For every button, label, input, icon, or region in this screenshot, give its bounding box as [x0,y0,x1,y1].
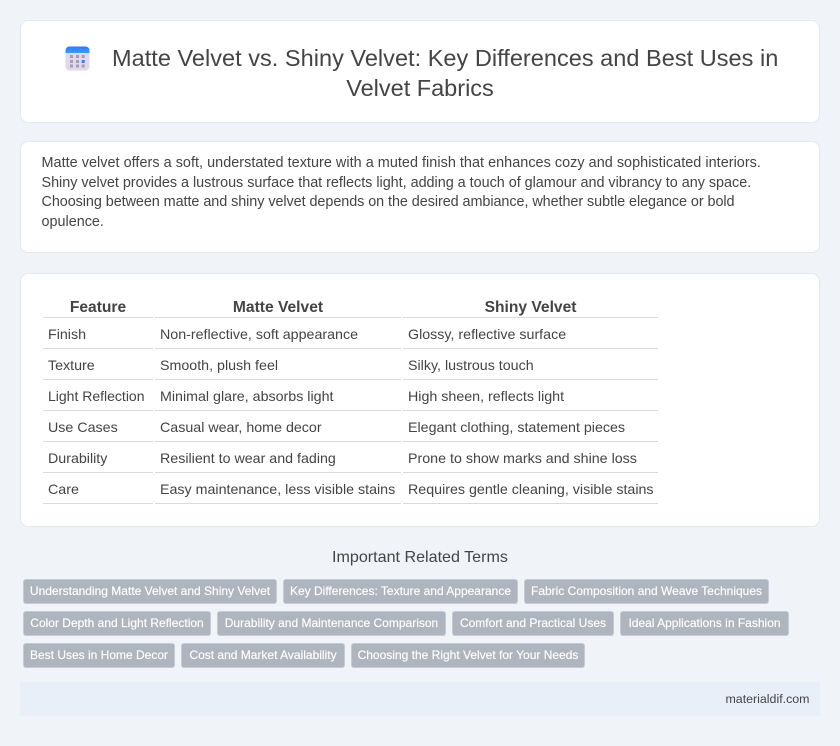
row: Finish: Finish [48,327,86,343]
tag [181,643,345,668]
tag [23,643,175,668]
row: Durability [48,451,637,467]
tag [452,611,614,636]
tag: Understanding Matte Velvet and Shiny Velvet [30,584,270,598]
row: Care [48,482,654,498]
footer source: materialdif.com [725,692,810,706]
row: Finish: Non-reflective, soft appearance [160,327,358,343]
tag: Fabric Composition and Weave Techniques [531,584,762,598]
tag: Color Depth and Light Reflection [30,616,204,630]
header panel [20,20,820,123]
row: Care: Care [48,482,79,498]
row: Use Cases [48,420,625,436]
tag: Best Uses in Home Decor [30,648,168,662]
tag [524,579,769,604]
icon: calendar [66,46,90,70]
row: Use Cases: Casual wear, home decor [160,420,322,436]
related term tags [23,579,789,668]
row: Texture: Silky, lustrous touch [408,358,534,374]
row: Texture: Smooth, plush feel [160,358,278,374]
row: Texture: Texture [48,358,95,374]
tag [217,611,446,636]
header: Feature: Feature [70,299,126,316]
tag: Comfort and Practical Uses [460,616,606,630]
title: Velvet Fabrics [346,74,494,100]
tag: Durability and Maintenance Comparison [225,616,438,630]
title [112,44,778,100]
tag: Choosing the Right Velvet for Your Needs [358,648,578,662]
row: Durability: Prone to show marks and shine loss [408,451,637,467]
header: Shiny Velvet: Shiny Velvet [485,299,576,316]
footer bar [20,682,820,716]
tag: Cost and Market Availability [189,648,337,662]
row: Use Cases: Use Cases [48,420,118,436]
tag [351,643,585,668]
intro paragraph [42,155,761,230]
intro paragraph: Shiny velvet provides a lustrous surface that reflects light, adding a touch of glamour and vibrancy to any space. [42,174,751,190]
row: Light Reflection [48,388,564,405]
row: Care: Easy maintenance, less visible stains [160,482,395,498]
intro paragraph: opulence. [42,214,104,230]
row: Use Cases: Elegant clothing, statement pieces [408,420,625,436]
related terms heading: Important Related Terms [332,548,508,566]
title: Matte Velvet vs. Shiny Velvet: Key Differences and Best Uses in [112,44,778,70]
intro text panel [20,141,820,253]
comparison table panel [20,273,820,527]
row: Durability: Resilient to wear and fading [160,451,336,467]
header: Matte Velvet: Matte Velvet [233,299,323,316]
row: Light Reflection: High sheen, reflects light [408,389,564,405]
tag [620,611,789,636]
row: Light Reflection: Minimal glare, absorbs light [160,389,333,405]
row: Texture [48,358,534,374]
tag: Ideal Applications in Fashion [628,616,781,630]
tag: Key Differences: Texture and Appearance [290,584,511,598]
tag [283,579,518,604]
row: Finish [48,327,566,343]
row: Care: Requires gentle cleaning, visible stains [408,482,654,498]
intro paragraph: Choosing between matte and shiny velvet depends on the desired ambiance, whether subtle elegance or bold [42,194,734,210]
row: Finish: Glossy, reflective surface [408,327,566,343]
comparison table [43,299,658,504]
row: Light Reflection: Light Reflection [48,388,145,404]
row: Durability: Durability [48,451,107,467]
tag [23,579,277,604]
tag [23,611,211,636]
intro paragraph: Matte velvet offers a soft, understated texture with a muted finish that enhances cozy and sophisticated interiors. [42,155,761,171]
